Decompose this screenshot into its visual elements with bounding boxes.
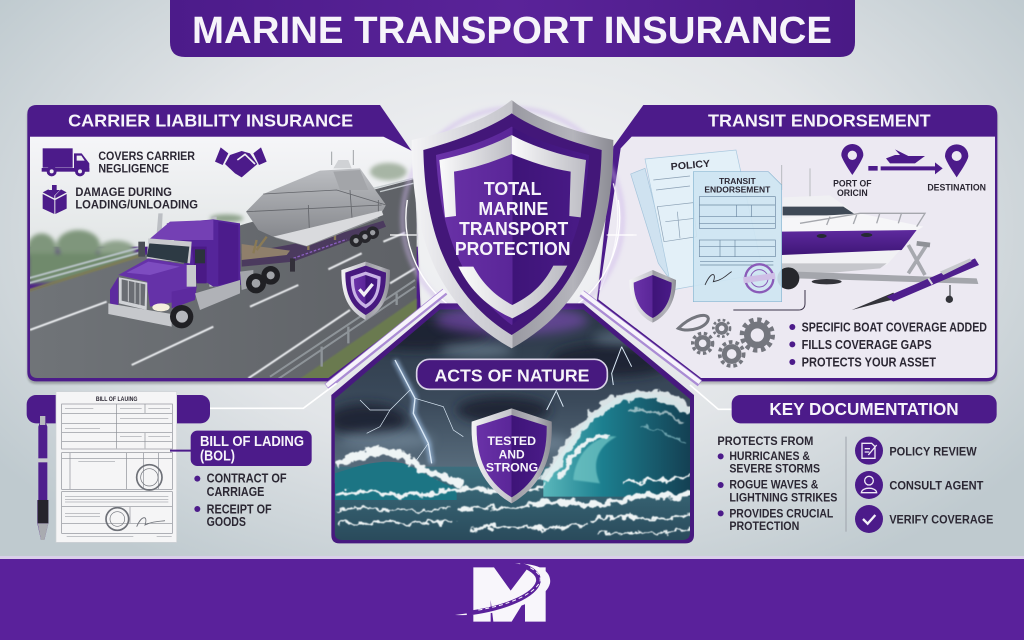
panel: bill of lading xyxy=(27,383,337,542)
key documentation header xyxy=(732,395,997,423)
trailer xyxy=(242,221,386,267)
connector line xyxy=(733,290,805,310)
panel: transit endorsement xyxy=(597,105,997,384)
acts of nature pill: ACTS OF NATURE xyxy=(434,366,590,386)
text: carrier points: COVERS CARRIER xyxy=(98,150,196,163)
bill of lading bullets: GOODS xyxy=(207,515,246,529)
documents: TRANSIT xyxy=(719,177,756,186)
glow under shield xyxy=(435,305,588,335)
semi truck xyxy=(108,213,280,328)
transit bullets: FILLS COVERAGE GAPS xyxy=(802,338,932,352)
glow connector xyxy=(690,385,732,409)
documents: POLICY xyxy=(670,159,711,173)
documents: ENDORSEMENT xyxy=(704,185,770,194)
header bar xyxy=(27,395,210,423)
left wave xyxy=(335,462,457,500)
icon: small shield xyxy=(629,270,676,323)
panel shield badge xyxy=(341,262,390,320)
action labels: VERIFY COVERAGE xyxy=(889,513,994,526)
action labels: POLICY REVIEW xyxy=(889,445,977,458)
icon: pen xyxy=(37,415,48,540)
endorsement body xyxy=(598,137,995,378)
text: carrier points: LOADING/UNLOADING xyxy=(75,199,198,212)
document xyxy=(56,392,177,542)
foam xyxy=(333,487,543,495)
bill of lading label: BILL OF LADING xyxy=(200,434,304,450)
protects from list xyxy=(717,435,838,533)
shield text: TOTAL xyxy=(484,178,541,199)
title: MARINE TRANSPORT INSURANCE xyxy=(192,10,832,52)
bill of lading label xyxy=(191,431,312,466)
icon: truck xyxy=(42,148,89,176)
route: port to destination: DESTINATION xyxy=(927,182,986,192)
icon: consult agent xyxy=(855,471,883,499)
lane markings xyxy=(30,233,415,378)
action labels: CONSULT AGENT xyxy=(889,479,983,492)
central shield: TRANSPORT xyxy=(459,218,569,239)
lightning xyxy=(360,347,632,463)
route: port to destination: ORICIN xyxy=(837,188,868,198)
text: carrier points xyxy=(75,150,198,212)
covered boat xyxy=(246,150,386,253)
text: carrier points: NEGLIGENCE xyxy=(98,163,169,176)
icon: policy review xyxy=(855,437,883,465)
tested shield: STRONG xyxy=(486,461,538,475)
key documentation header: KEY DOCUMENTATION xyxy=(769,399,959,419)
protects from list: PROVIDES CRUCIAL xyxy=(729,507,833,520)
central shield: MARINE xyxy=(478,198,548,219)
tested shield xyxy=(472,408,552,503)
tested shield: TESTED xyxy=(487,434,536,448)
logo xyxy=(455,563,550,622)
central shield: PROTECTION xyxy=(455,238,570,259)
title banner xyxy=(170,0,855,57)
transit bullets xyxy=(789,321,987,369)
shield inner silver bands xyxy=(439,135,586,318)
icon: box xyxy=(43,185,67,214)
bill of lading bullets xyxy=(194,472,287,529)
center composition xyxy=(327,100,700,543)
protects from list: HURRICANES & xyxy=(729,450,811,463)
transit bullets: SPECIFIC BOAT COVERAGE ADDED xyxy=(802,321,987,335)
documents xyxy=(631,150,782,302)
route: port to destination xyxy=(833,144,986,198)
glow arcs xyxy=(600,183,637,290)
icon: handshake xyxy=(215,147,267,177)
storm scene xyxy=(327,303,697,543)
highway scene xyxy=(27,133,427,383)
route: port to destination: PORT OF xyxy=(833,179,872,189)
carrier header: CARRIER LIABILITY INSURANCE xyxy=(68,111,353,131)
bill of lading bullets: RECEIPT OF xyxy=(207,502,272,516)
big wave xyxy=(543,393,692,497)
white diagonal bands xyxy=(327,291,700,387)
icon: pen xyxy=(852,258,979,310)
central shield xyxy=(412,100,613,348)
protects from list: PROTECTS FROM xyxy=(717,435,813,448)
transit header: TRANSIT ENDORSEMENT xyxy=(708,111,931,131)
tested shield: AND xyxy=(499,447,525,461)
protects from list: PROTECTION xyxy=(729,520,799,533)
glow rings xyxy=(390,108,633,328)
transit bullets: PROTECTS YOUR ASSET xyxy=(802,355,936,369)
panel: acts of nature xyxy=(327,303,697,543)
protects from list: ROGUE WAVES & xyxy=(729,479,819,492)
acts of nature pill xyxy=(417,359,607,389)
protects from list: SEVERE STORMS xyxy=(729,463,820,476)
protects from list: LIGHTNING STRIKES xyxy=(729,492,838,505)
sea xyxy=(330,467,697,543)
document: BILL OF LAUING xyxy=(96,396,137,403)
text: carrier points: DAMAGE DURING xyxy=(75,186,172,199)
action labels xyxy=(889,445,994,526)
footer band xyxy=(0,556,1024,640)
icon: verify coverage xyxy=(855,505,883,533)
bill of lading bullets: CONTRACT OF xyxy=(207,472,287,486)
yacht on trailer xyxy=(777,165,978,303)
panel: key documentation xyxy=(690,385,997,533)
bill of lading bullets: CARRIAGE xyxy=(207,485,264,499)
bill of lading label: (BOL) xyxy=(200,448,235,464)
panel: carrier liability insurance xyxy=(27,105,427,384)
glow connector xyxy=(210,383,337,408)
icon: gears xyxy=(678,315,773,366)
